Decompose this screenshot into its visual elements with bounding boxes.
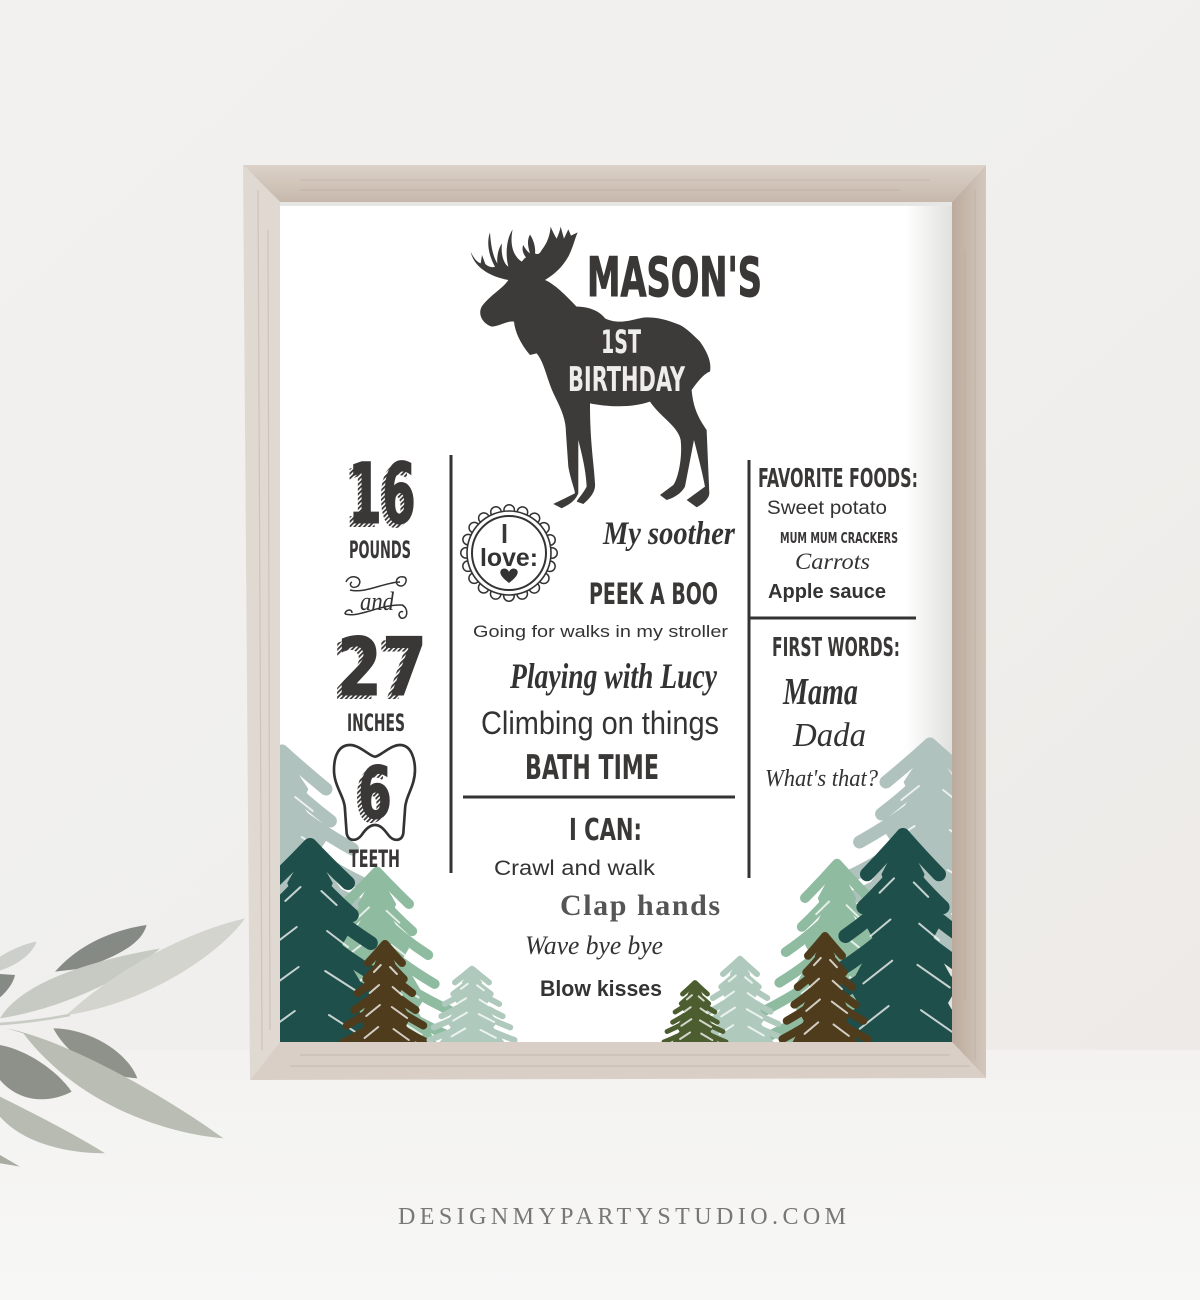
favorite foods: FAVORITE FOODS: <box>758 464 918 494</box>
I love badge <box>466 510 552 596</box>
left forest <box>280 744 518 1042</box>
I love badge: love: <box>480 544 538 572</box>
stat: 16 pounds: POUNDS <box>349 536 411 564</box>
I love list: PEEK A BOO <box>589 577 718 611</box>
footer website: DESIGNMYPARTYSTUDIO.COM <box>398 1204 846 1230</box>
I love badge: I <box>501 520 508 550</box>
first words: Mama <box>782 671 858 713</box>
I can list <box>494 813 720 1001</box>
olive branch <box>0 918 245 1167</box>
and flourish: and <box>360 587 395 616</box>
favorite foods: Sweet potato <box>767 498 887 519</box>
stat: 16 pounds: 16 <box>348 445 416 543</box>
left brown pine <box>342 943 428 1052</box>
favorite foods: MUM MUM CRACKERS <box>780 529 898 547</box>
stat: 6 teeth: 6 <box>354 755 388 839</box>
subtitle on moose: 1ST <box>601 323 641 361</box>
stat: 27 inches: INCHES <box>347 709 405 737</box>
right dark pine <box>838 828 952 1042</box>
first words <box>765 633 900 792</box>
stat: 6 teeth: TEETH <box>349 845 400 873</box>
subtitle on moose <box>568 323 686 400</box>
stat: 27 inches: 27 <box>337 621 427 714</box>
I love list: Climbing on things <box>481 705 719 741</box>
left dark pine <box>280 838 378 1042</box>
wooden picture frame <box>243 165 986 1080</box>
favorite foods <box>758 464 918 603</box>
favorite foods: Apple sauce <box>768 581 886 603</box>
column dividers <box>451 455 916 878</box>
stat: 6 teeth: 6 <box>358 751 392 835</box>
first words: What's that? <box>765 766 878 792</box>
subtitle on moose: BIRTHDAY <box>568 360 686 400</box>
I love list: Going for walks in my stroller <box>473 622 728 641</box>
right pale pine <box>706 956 782 1042</box>
I love list <box>473 516 736 788</box>
I can list: Clap hands <box>560 889 720 922</box>
shelf surface <box>0 1050 1200 1300</box>
stat: 6 teeth <box>334 745 415 873</box>
I can list: I CAN: <box>569 813 642 848</box>
left grey pine <box>280 744 364 910</box>
I love list: BATH TIME <box>525 748 659 788</box>
stat: 27 inches: 27 <box>332 625 422 718</box>
right grey pine <box>849 738 952 952</box>
favorite foods: Carrots <box>795 549 870 574</box>
stat: 16 pounds: 16 <box>344 449 412 547</box>
title: Mason's: MASON'S <box>587 246 762 309</box>
right brown pine <box>782 935 868 1048</box>
I can list: Wave bye bye <box>525 931 663 960</box>
and flourish <box>345 577 407 618</box>
left green pine <box>342 866 453 1042</box>
moose silhouette <box>471 227 710 508</box>
I can list: Blow kisses <box>540 976 662 1001</box>
I can list: Crawl and walk <box>494 857 656 880</box>
first words: FIRST WORDS: <box>772 633 900 663</box>
right olive pine <box>664 982 726 1047</box>
left pale pine <box>430 968 514 1046</box>
I love list: Playing with Lucy <box>509 656 718 696</box>
first words: Dada <box>792 717 866 754</box>
I love list: My soother <box>602 516 736 552</box>
stat: 16 pounds <box>344 445 416 564</box>
right green pine <box>760 858 872 1042</box>
right forest <box>662 738 952 1042</box>
